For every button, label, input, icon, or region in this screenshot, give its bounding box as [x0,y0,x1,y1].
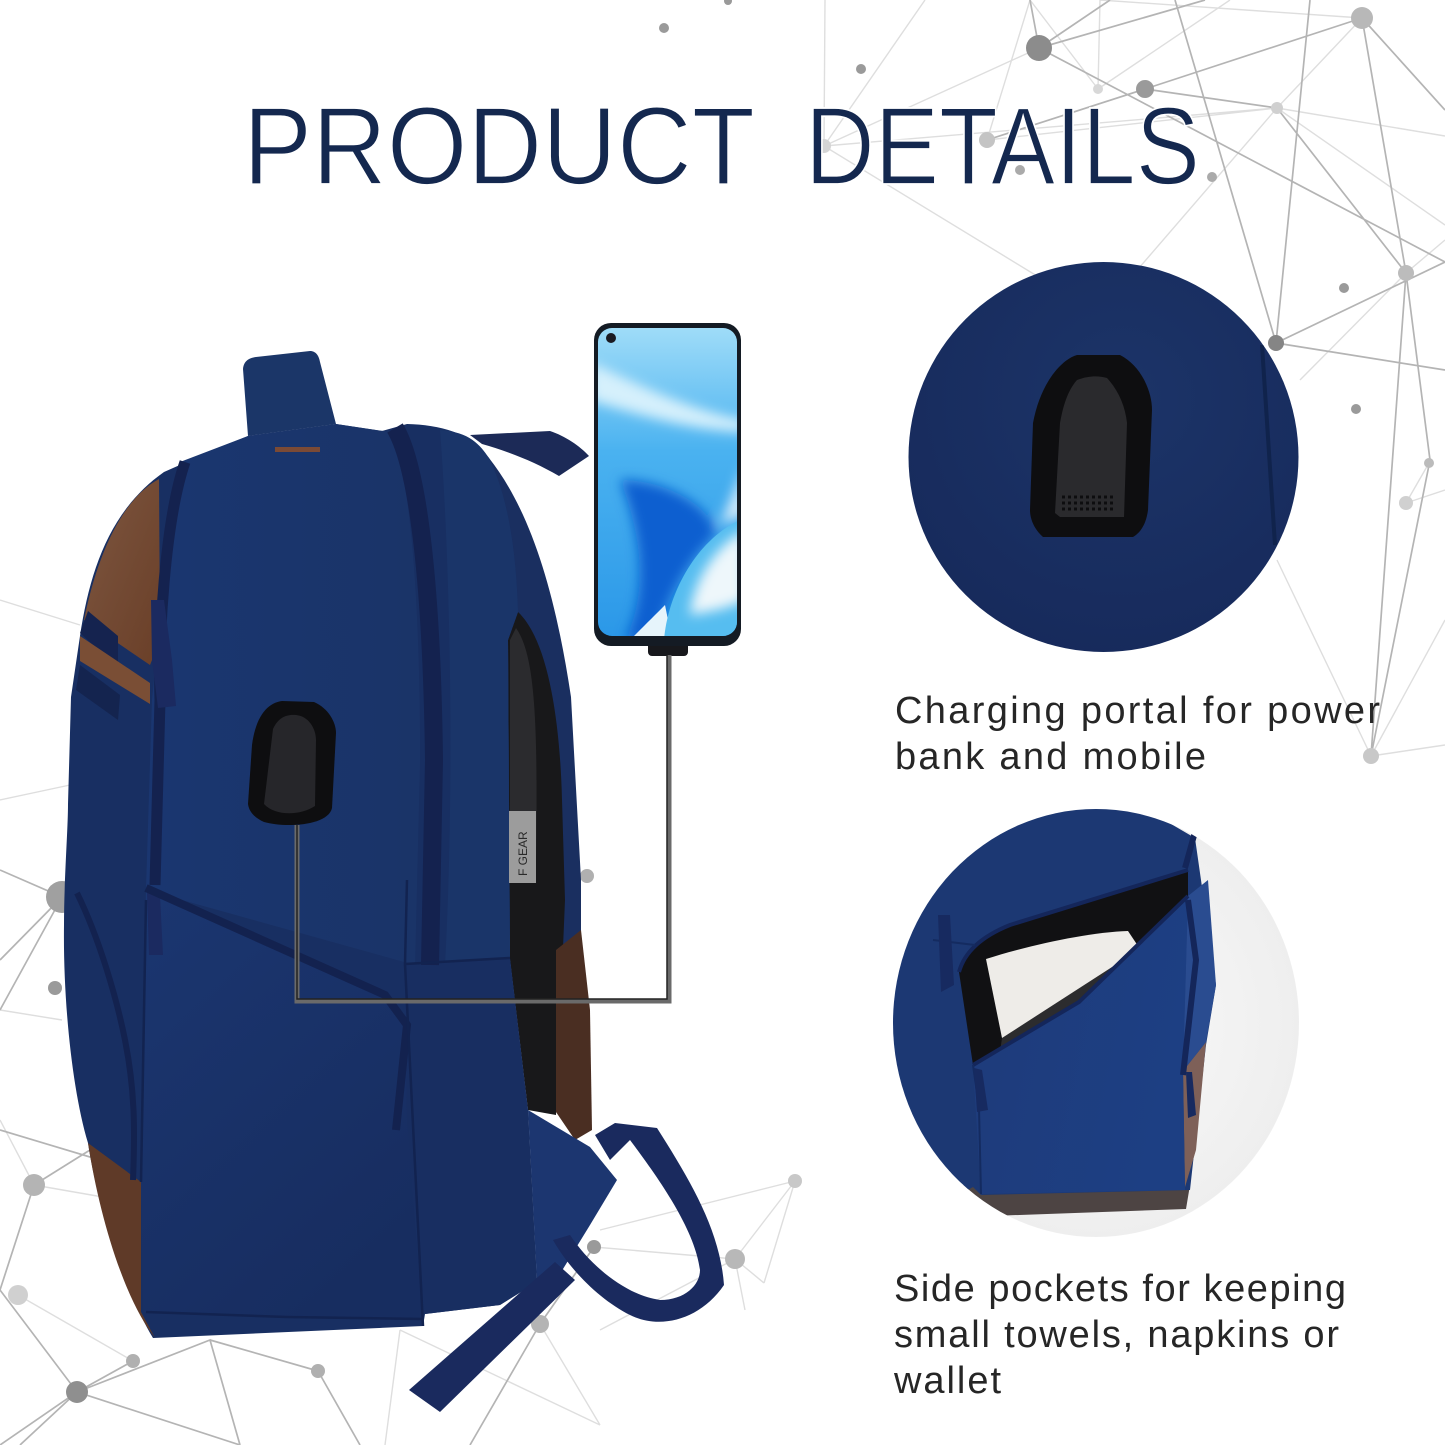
front zipper [155,462,185,885]
main body [64,424,537,1338]
bottom leather panel [88,1143,155,1338]
handle stitch [275,447,320,452]
front leather panel [84,479,160,665]
left panel zipper [77,893,134,1180]
black mesh padding [508,612,565,1115]
circle: side pocket detail [880,800,1299,1240]
caption: side pockets: wallet [893,1360,1001,1402]
pocket zipper [146,888,407,1130]
bag body [893,809,1216,1195]
centre panel [146,424,420,965]
rear strap tab [470,431,589,476]
pocket right panel [1183,880,1216,1071]
rear lower panel [405,958,537,1314]
panel seams [141,880,510,1326]
backpack illustration [64,351,724,1412]
front lower pocket panel [141,890,423,1319]
charging cable [297,655,669,1001]
main zipper band [395,428,434,965]
caption: charging: Charging portal for power [895,690,1380,732]
shoulder strap end [409,1262,575,1412]
zipper pulls [938,915,1196,1118]
title: PRODUCT [243,85,755,208]
bag base shadow [960,1185,1190,1216]
circle: charging port detail [908,262,1298,652]
towel [986,931,1140,1038]
back padding strap [489,458,581,1110]
caption: side pockets: small towels, napkins or [894,1314,1339,1356]
side wing [528,1110,617,1282]
pocket front [973,896,1188,1194]
phone wallpaper [598,359,737,636]
carry handle [243,351,336,436]
backpack illustration: F GEAR [516,831,530,876]
leather corner [1183,1042,1206,1187]
shoulder strap loop [553,1123,724,1322]
brand tag [509,811,536,883]
zipper pulls [147,600,176,955]
usb dots [1062,497,1116,509]
usb port [248,701,336,825]
caption: charging: bank and mobile [895,736,1206,778]
caption: side pockets: Side pockets for keeping [894,1268,1346,1310]
lining [1001,968,1112,1046]
pocket opening [959,870,1188,1065]
right panel [440,430,518,965]
title: DETAILS [805,85,1200,208]
usb port close-up [1030,355,1152,537]
phone [590,323,745,656]
brown rear panel [556,930,592,1140]
zippers [959,870,1188,1065]
